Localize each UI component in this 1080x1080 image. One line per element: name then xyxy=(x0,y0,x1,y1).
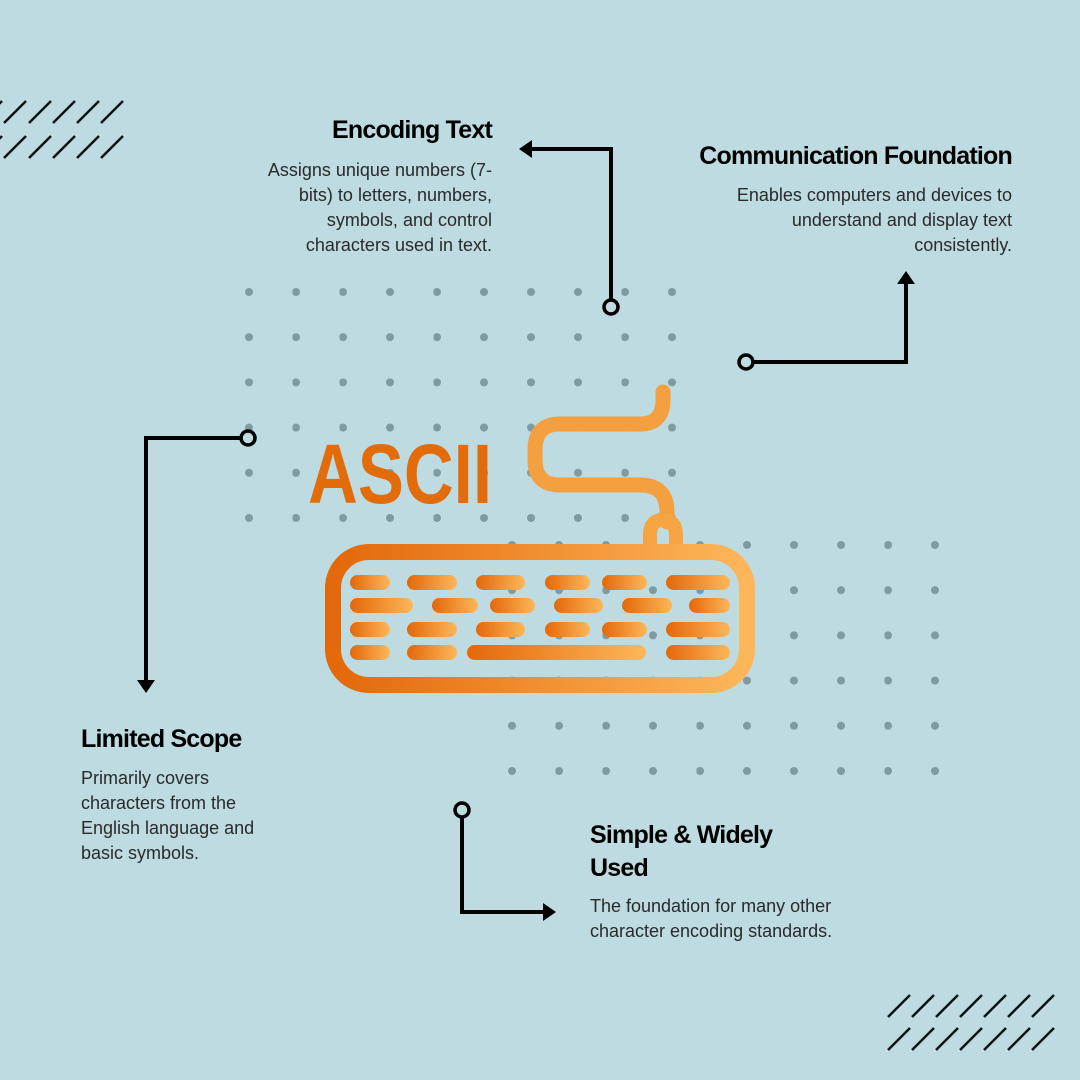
heading: communication foundation: Communication Foundation xyxy=(699,142,1012,170)
arrow: simple & widely used xyxy=(455,803,556,921)
arrow: communication foundation xyxy=(739,271,915,369)
arrow: limited scope xyxy=(137,431,255,693)
ascii label: ASCII xyxy=(308,427,492,521)
text: communication foundation: understand and display text xyxy=(792,210,1012,230)
heading: simple & widely used: Simple & Widely Used xyxy=(590,821,772,882)
arrow: encoding text xyxy=(519,140,618,314)
text: encoding text: Assigns unique numbers (7- xyxy=(268,160,492,180)
text: encoding text: characters used in text. xyxy=(306,235,492,255)
text: communication foundation: consistently. xyxy=(914,235,1012,255)
text: encoding text xyxy=(268,160,492,255)
icon: keyboard xyxy=(333,392,747,685)
text: communication foundation xyxy=(737,185,1012,255)
heading: limited scope: Limited Scope xyxy=(81,725,241,753)
text: simple & widely used: The foundation for many other character encoding standards. xyxy=(590,896,832,941)
text: communication foundation: Enables computers and devices to xyxy=(737,185,1012,205)
text: encoding text: symbols, and control xyxy=(327,210,492,230)
text: limited scope: Primarily covers characters from the English language and basic symbols. xyxy=(81,768,254,863)
text: encoding text: bits) to letters, numbers, xyxy=(299,185,492,205)
heading: encoding text: Encoding Text xyxy=(332,116,492,144)
